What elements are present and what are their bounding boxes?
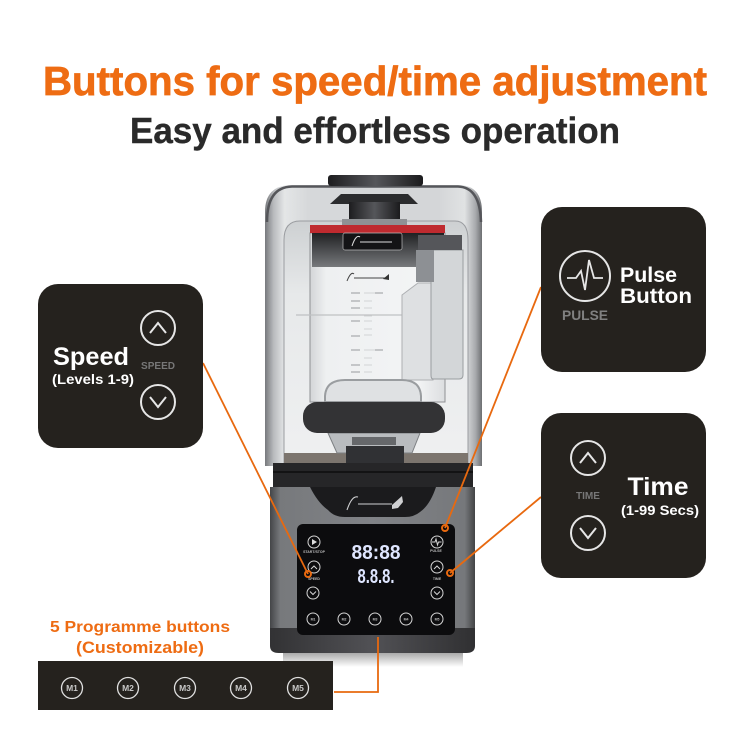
pulse caption: PULSE: [562, 307, 608, 323]
M labels: M1: [66, 683, 78, 693]
small panel labels: PULSE: [430, 549, 442, 553]
callout connector: speed: [203, 363, 311, 577]
small panel labels: M3: [373, 618, 377, 622]
time label: Time: [628, 473, 689, 501]
callout connector: programme: [334, 637, 378, 692]
base: [270, 463, 475, 653]
speed label: Speed: [53, 343, 129, 371]
blender product image: [265, 175, 482, 667]
pulse label: Pulse: [620, 264, 677, 287]
icon: time down: [571, 516, 605, 550]
small panel labels: TIME: [433, 577, 442, 581]
icon: speed up: [141, 311, 175, 345]
graduation scale: [351, 292, 383, 373]
small panel buttons: [307, 536, 443, 625]
speed range: (Levels 1-9): [52, 371, 134, 387]
rubber ring: [303, 402, 445, 433]
M labels: M4: [235, 683, 247, 693]
callout connector: pulse: [442, 287, 541, 531]
floor shadow: [283, 653, 463, 667]
small panel labels: M1: [311, 618, 315, 622]
button label: Button: [620, 285, 692, 308]
icon: speed down: [141, 385, 175, 419]
small panel labels: M4: [404, 618, 408, 622]
M labels: M5: [292, 683, 304, 693]
panel: pulse: [541, 207, 706, 372]
time range: (1-99 Secs): [621, 502, 699, 518]
time caption: TIME: [576, 491, 600, 502]
small panel labels: START/STOP: [303, 550, 326, 554]
icon: pulse: [560, 251, 610, 301]
small panel labels: M2: [342, 618, 346, 622]
logo notch: [310, 487, 436, 517]
display: speed: 8.8.8.: [358, 566, 394, 588]
programme heading: 5 Programme buttons: [50, 619, 230, 636]
M labels: M3: [179, 683, 191, 693]
callout connector: time: [447, 497, 541, 576]
panel: speed: [38, 284, 203, 448]
control panel: [297, 524, 455, 635]
title: Buttons for speed/time adjustment: [43, 58, 707, 104]
transparent noise shield: [265, 185, 482, 466]
jar handle: [402, 235, 463, 380]
programme subheading: (Customizable): [76, 638, 204, 657]
display: timer: 88:88: [352, 542, 400, 564]
speed caption: SPEED: [141, 361, 175, 372]
subtitle: Easy and effortless operation: [130, 110, 620, 151]
small panel labels: SPEED: [308, 577, 320, 581]
M labels: [66, 683, 304, 693]
jar base and blades: [325, 380, 421, 466]
M labels: M2: [122, 683, 134, 693]
blending jar: [296, 225, 462, 402]
icon: time up: [571, 441, 605, 475]
panel: programme buttons: [38, 661, 333, 710]
small panel labels: [303, 549, 442, 622]
lid: [328, 175, 423, 225]
M buttons: [62, 678, 308, 698]
panel: time: [541, 413, 706, 578]
small panel labels: M5: [435, 618, 439, 622]
